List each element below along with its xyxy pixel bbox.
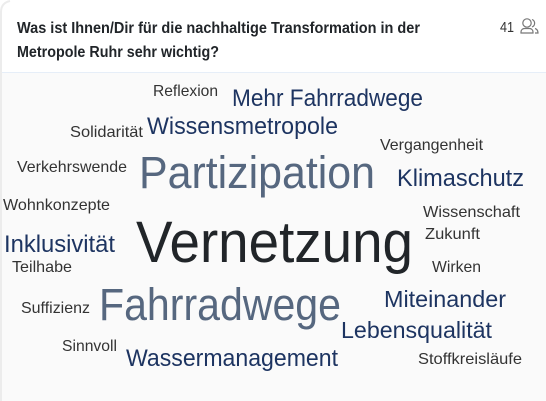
word: Vernetzung: Vernetzung bbox=[136, 210, 413, 275]
word: Wohnkonzepte: Wohnkonzepte bbox=[3, 197, 110, 214]
word: Suffizienz: Suffizienz bbox=[21, 300, 90, 317]
word cloud bbox=[3, 83, 524, 372]
word: Teilhabe: Teilhabe bbox=[12, 259, 72, 276]
heading: question: Metropole Ruhr sehr wichtig? bbox=[17, 44, 219, 61]
heading: question: Was ist Ihnen/Dir für die nachhaltige Transformation in der bbox=[17, 20, 420, 37]
word: Partizipation: Partizipation bbox=[139, 147, 375, 198]
word: Reflexion: Reflexion bbox=[153, 83, 218, 100]
word: Klimaschutz: Klimaschutz bbox=[397, 165, 524, 192]
word: Wissenschaft: Wissenschaft bbox=[423, 204, 521, 221]
word: Miteinander: Miteinander bbox=[384, 286, 506, 312]
word: Stoffkreisläufe: Stoffkreisläufe bbox=[418, 351, 522, 368]
word: Sinnvoll: Sinnvoll bbox=[62, 338, 117, 355]
word: Wirken: Wirken bbox=[432, 259, 481, 276]
word: Wassermanagement: Wassermanagement bbox=[126, 345, 338, 372]
word: Mehr Fahrradwege: Mehr Fahrradwege bbox=[232, 85, 423, 112]
participant count: 41 bbox=[500, 19, 514, 36]
word: Vergangenheit: Vergangenheit bbox=[380, 137, 484, 154]
word: Solidarität: Solidarität bbox=[70, 124, 144, 141]
word: Lebensqualität: Lebensqualität bbox=[341, 317, 493, 343]
word: Fahrradwege: Fahrradwege bbox=[99, 279, 341, 330]
icon: participants bbox=[521, 19, 538, 33]
heading: question bbox=[17, 20, 420, 61]
word: Zukunft: Zukunft bbox=[425, 226, 481, 243]
word: Inklusivität: Inklusivität bbox=[4, 231, 115, 258]
word: Wissensmetropole: Wissensmetropole bbox=[147, 113, 338, 140]
word: Verkehrswende: Verkehrswende bbox=[17, 159, 127, 176]
